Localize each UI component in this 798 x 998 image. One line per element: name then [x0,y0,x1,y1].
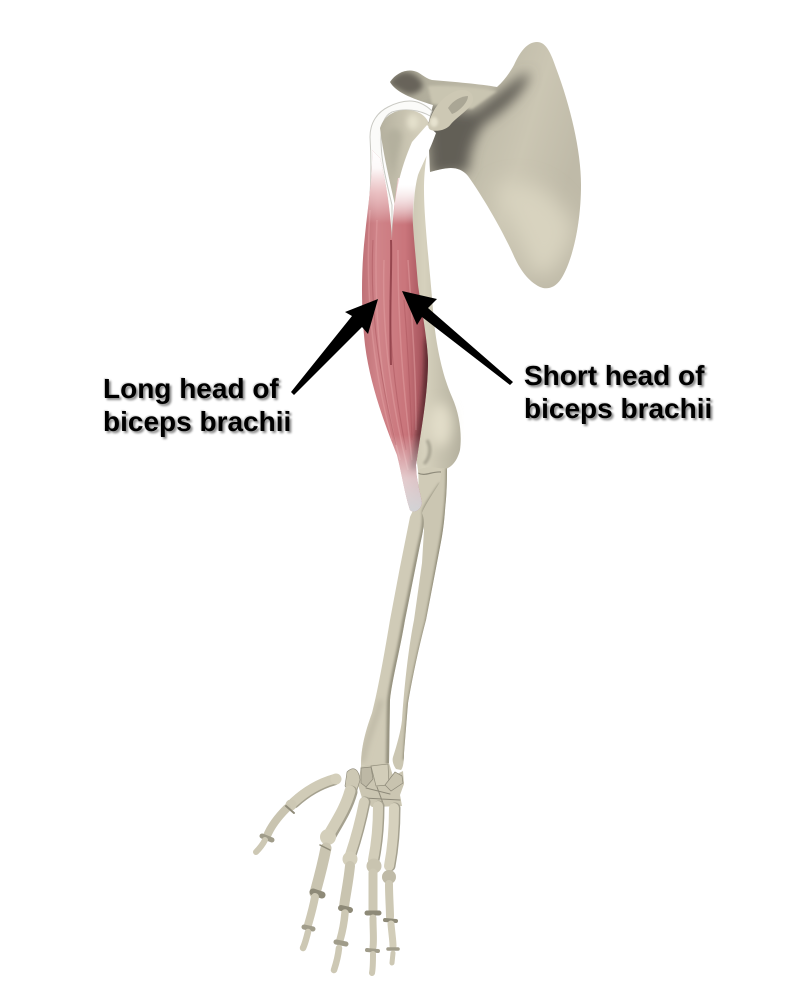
ulna [393,468,448,770]
humerus [380,110,461,470]
arrow: short head [402,291,513,385]
thumb [256,774,342,852]
radius [361,467,442,766]
middle finger [334,802,365,970]
scapula [388,42,581,288]
label: short head of biceps brachii: Short head of [524,360,704,391]
index finger [303,791,351,948]
label: short head of biceps brachii [524,360,714,428]
label: long head of biceps brachii: biceps brachii [103,406,291,437]
carpal bones [345,763,404,807]
label: long head of biceps brachii [103,373,293,440]
anatomical illustration [253,42,581,976]
label: long head of biceps brachii: Long head of [103,373,279,404]
hand skeleton [256,763,404,973]
biceps brachii muscle [362,150,428,512]
ring finger [366,806,382,973]
label: short head of biceps brachii: biceps brachii [524,393,712,424]
long head tendon [366,101,432,240]
coracoid process [428,90,473,131]
short head tendon [393,125,436,228]
arrow: long head [291,299,378,395]
little finger [382,808,398,963]
